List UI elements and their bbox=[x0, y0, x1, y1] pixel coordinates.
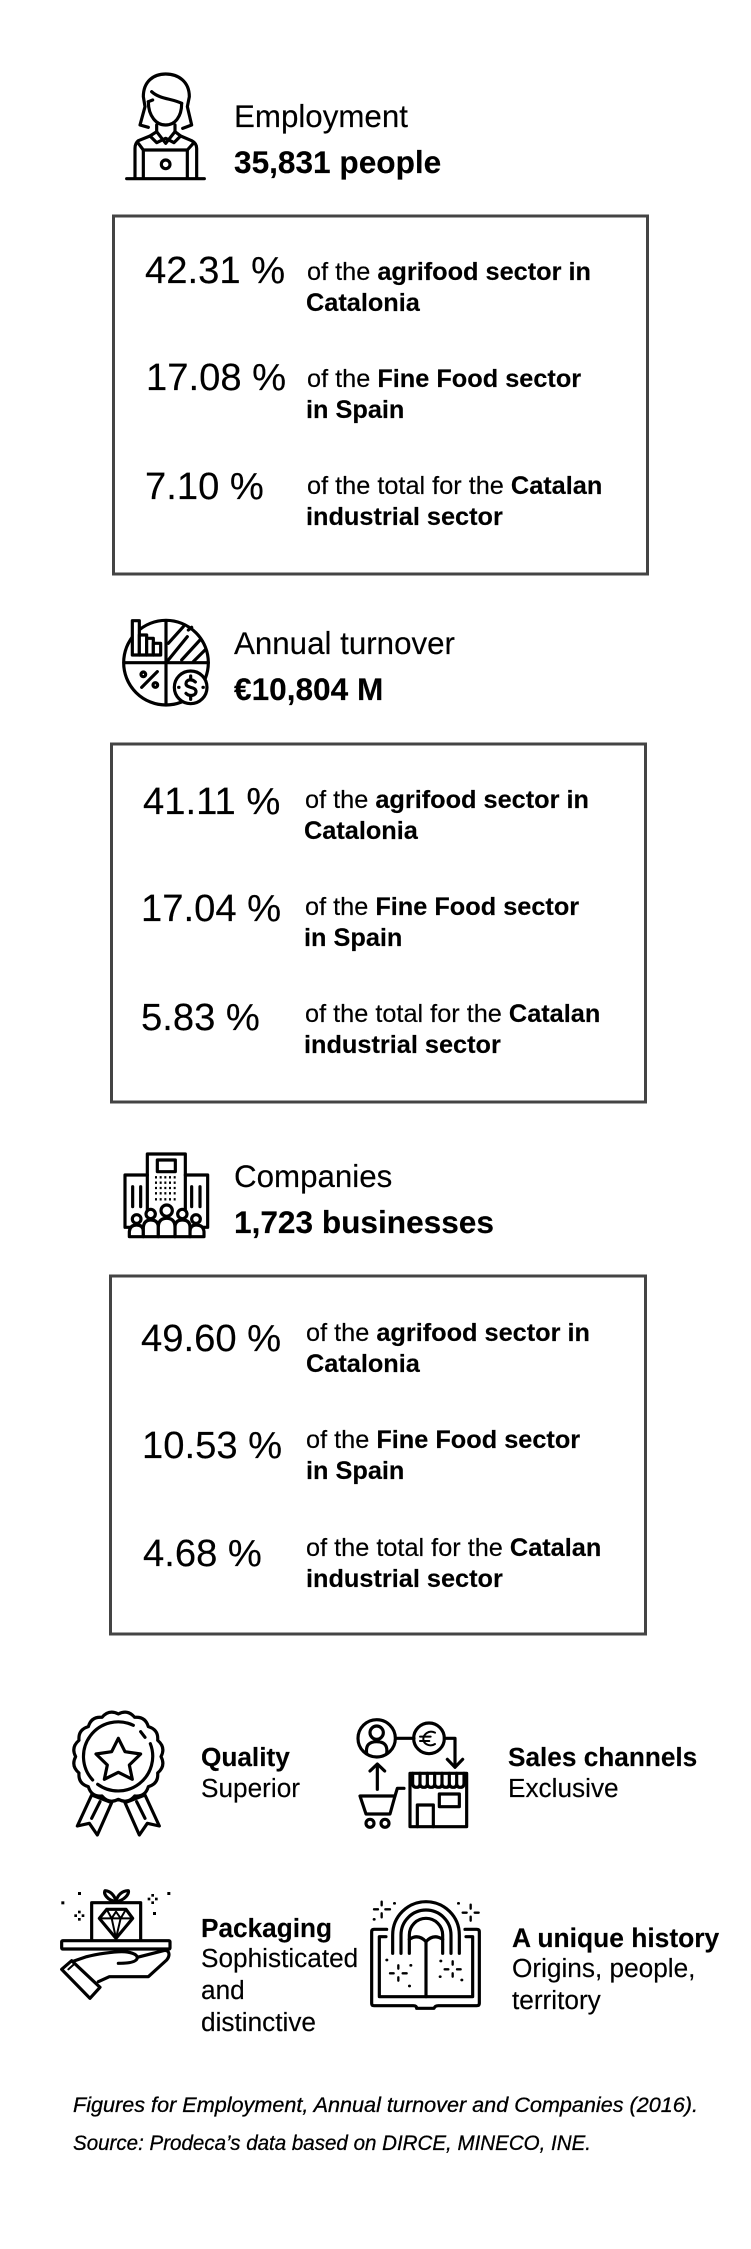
row: Catalan industrial sector: of the total for the Catalan bbox=[306, 1534, 601, 1562]
row: agrifood sector in Catalonia: 42.31 % bbox=[145, 249, 285, 292]
panel: companies percentages bbox=[110, 1276, 646, 1634]
label: packaging: and bbox=[201, 1975, 245, 2005]
row: Catalan industrial sector bbox=[141, 996, 600, 1059]
label: packaging: Packaging bbox=[201, 1913, 332, 1943]
row: Catalan industrial sector: industrial sector bbox=[304, 1031, 501, 1059]
label: packaging: distinctive bbox=[201, 2007, 316, 2037]
heading: employment: 35,831 people bbox=[234, 144, 441, 180]
label: quality bbox=[201, 1742, 300, 1803]
row: Fine Food sector in Spain bbox=[141, 887, 579, 952]
row: agrifood sector in Catalonia: Catalonia bbox=[306, 289, 421, 317]
row: Catalan industrial sector: industrial sector bbox=[306, 1565, 503, 1593]
row: Fine Food sector in Spain: 17.08 % bbox=[146, 356, 286, 399]
label: a unique history: A unique history bbox=[512, 1923, 720, 1953]
icon: woman at laptop bbox=[127, 74, 204, 179]
footnote: figures and source: Figures for Employment, Annual turnover and Companies (2016). bbox=[73, 2094, 698, 2117]
footnote: figures and source: Source: Prodeca’s data based on DIRCE, MINECO, INE. bbox=[73, 2132, 591, 2155]
row: agrifood sector in Catalonia: 49.60 % bbox=[141, 1317, 281, 1360]
heading: annual turnover: €10,804 M bbox=[234, 671, 383, 707]
icon: pie chart with bars and coin bbox=[124, 620, 208, 705]
row: Catalan industrial sector: of the total for the Catalan bbox=[305, 1000, 600, 1028]
row: Fine Food sector in Spain: in Spain bbox=[304, 924, 402, 952]
heading: companies: Companies bbox=[234, 1159, 392, 1194]
row: agrifood sector in Catalonia: Catalonia bbox=[304, 817, 419, 845]
panel: turnover percentages bbox=[112, 744, 646, 1102]
label: sales channels: Exclusive bbox=[508, 1773, 619, 1803]
row: Catalan industrial sector: 5.83 % bbox=[141, 996, 260, 1039]
row: Catalan industrial sector: industrial sector bbox=[306, 503, 503, 531]
row: Fine Food sector in Spain: of the Fine Food sector bbox=[306, 1426, 580, 1454]
label: packaging: Sophisticated bbox=[201, 1943, 358, 1973]
row: Fine Food sector in Spain: 17.04 % bbox=[141, 887, 281, 930]
row: agrifood sector in Catalonia bbox=[141, 1317, 590, 1378]
row: agrifood sector in Catalonia: 41.11 % bbox=[143, 780, 280, 823]
row: Catalan industrial sector bbox=[143, 1532, 601, 1593]
icon: sales channels bbox=[358, 1720, 467, 1827]
row: Fine Food sector in Spain: 10.53 % bbox=[142, 1424, 282, 1467]
heading: annual turnover: Annual turnover bbox=[234, 626, 455, 661]
label: packaging bbox=[201, 1913, 358, 2037]
heading: companies: 1,723 businesses bbox=[234, 1204, 494, 1240]
row: agrifood sector in Catalonia bbox=[145, 249, 591, 317]
row: Catalan industrial sector: 7.10 % bbox=[145, 465, 264, 508]
icon: open book with arches bbox=[372, 1902, 479, 2008]
row: Fine Food sector in Spain: in Spain bbox=[306, 396, 404, 424]
heading: companies bbox=[234, 1159, 494, 1240]
icon: gift diamond on a hand bbox=[61, 1891, 170, 1998]
label: a unique history: Origins, people, bbox=[512, 1953, 695, 1983]
panel: employment percentages bbox=[114, 216, 648, 574]
label: quality: Superior bbox=[201, 1773, 300, 1803]
footnote: figures and source bbox=[73, 2094, 698, 2155]
row: agrifood sector in Catalonia bbox=[143, 780, 589, 845]
label: a unique history bbox=[512, 1923, 720, 2015]
row: Catalan industrial sector: 4.68 % bbox=[143, 1532, 262, 1575]
row: agrifood sector in Catalonia: Catalonia bbox=[306, 1350, 421, 1378]
label: sales channels bbox=[508, 1742, 697, 1803]
icon: office buildings with people bbox=[125, 1154, 208, 1237]
row: Catalan industrial sector bbox=[145, 465, 602, 531]
heading: employment bbox=[234, 99, 441, 180]
row: Catalan industrial sector: of the total for the Catalan bbox=[307, 472, 602, 500]
label: quality: Quality bbox=[201, 1742, 290, 1772]
label: sales channels: Sales channels bbox=[508, 1742, 697, 1772]
row: agrifood sector in Catalonia: of the agrifood sector in bbox=[305, 786, 589, 814]
row: Fine Food sector in Spain: of the Fine Food sector bbox=[305, 893, 579, 921]
row: Fine Food sector in Spain bbox=[146, 356, 581, 424]
row: Fine Food sector in Spain: of the Fine Food sector bbox=[307, 365, 581, 393]
heading: annual turnover bbox=[234, 626, 455, 707]
heading: employment: Employment bbox=[234, 99, 408, 134]
row: Fine Food sector in Spain: in Spain bbox=[306, 1457, 404, 1485]
icon: quality medal with star bbox=[74, 1712, 163, 1835]
row: agrifood sector in Catalonia: of the agrifood sector in bbox=[307, 258, 591, 286]
row: Fine Food sector in Spain bbox=[142, 1424, 580, 1485]
label: a unique history: territory bbox=[512, 1985, 602, 2015]
row: agrifood sector in Catalonia: of the agrifood sector in bbox=[306, 1319, 590, 1347]
